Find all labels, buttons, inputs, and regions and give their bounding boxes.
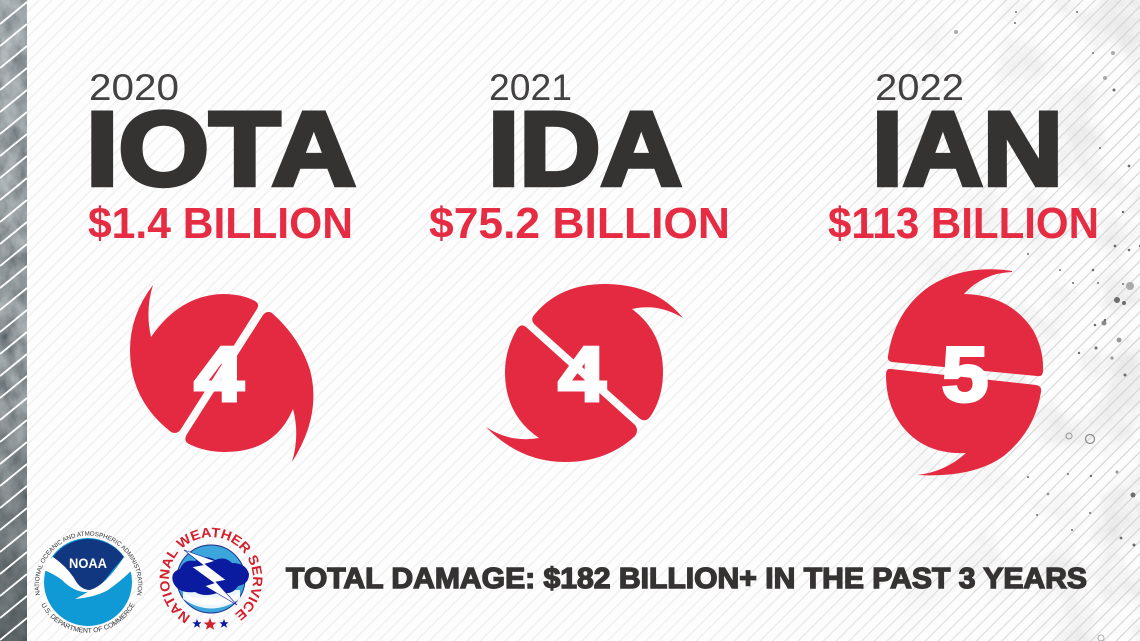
icon: category 4 hurricane Ida [486,284,683,462]
Ida year: 2021 [489,67,572,108]
Ian name: IAN [872,91,1063,208]
Ian year: 2022 [875,67,964,108]
icon: category 4 hurricane Iota: 4 [194,330,244,418]
Ian damage: $113 BILLION [828,199,1099,248]
icon: category 5 hurricane Ian [886,269,1043,475]
panel: Ida 2021 [429,67,730,462]
Iota damage: $1.4 BILLION [88,199,353,248]
icon: NOAA logo: NOAA [69,555,107,571]
icon: National Weather Service logo: NATIONAL WEATHER SERVICE [160,528,262,624]
icon: NOAA logo: U.S. DEPARTMENT OF COMMERCE [42,602,135,633]
total damage text: TOTAL DAMAGE: $182 BILLION+ IN THE PAST 3 YEARS [286,563,1087,595]
icon: category 4 hurricane Iota [130,285,313,462]
icon: category 4 hurricane Ida: 4 [558,330,606,418]
Iota name: IOTA [86,91,356,208]
Iota year: 2020 [89,67,179,108]
Ida damage: $75.2 BILLION [429,199,730,248]
photo strip: left edge [0,0,27,641]
panel: Ian 2022 [828,67,1099,475]
panel: Iota 2020 [86,67,356,462]
Ida name: IDA [488,91,682,208]
spatter dots: right side [954,11,1140,641]
icon: NOAA logo: NATIONAL OCEANIC AND ATMOSPHERIC ADMINISTRATION [34,531,142,596]
icon: category 5 hurricane Ian: 5 [942,330,988,418]
icon: NOAA logo [34,531,142,633]
